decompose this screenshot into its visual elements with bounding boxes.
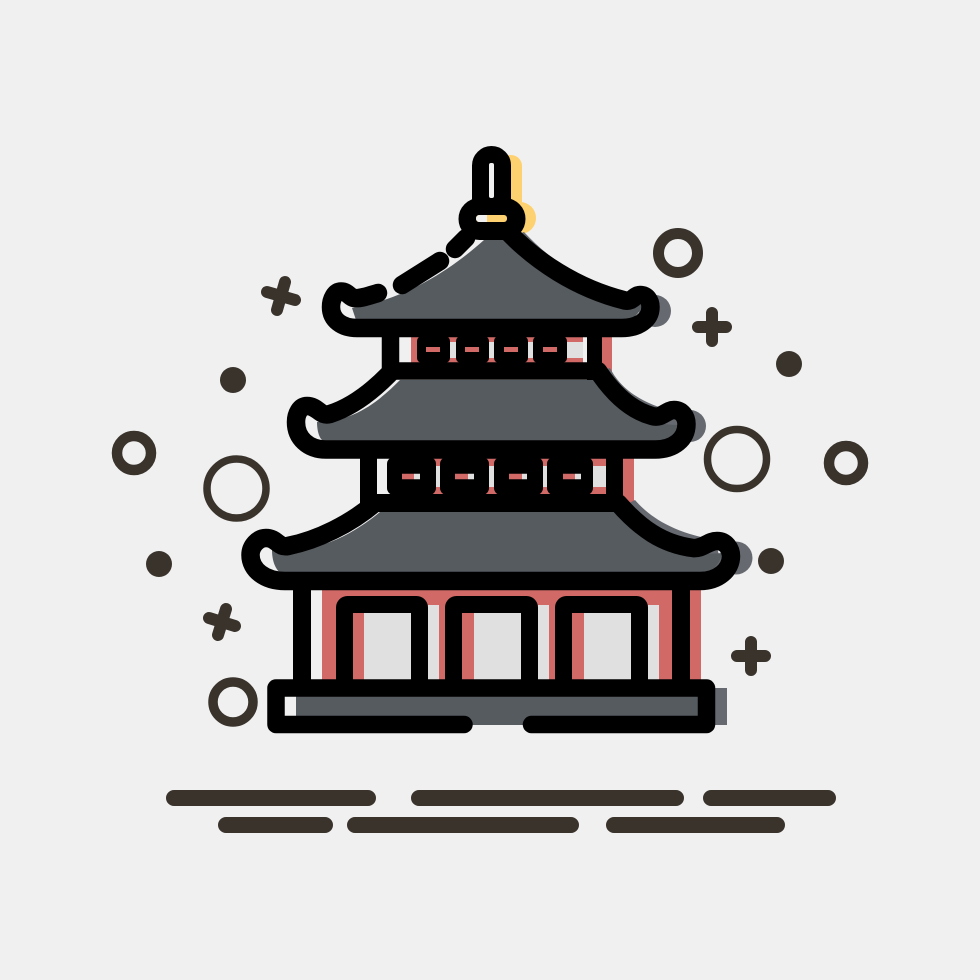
roof dashes <box>402 238 466 285</box>
roof outlines <box>250 232 731 581</box>
middle roof fill <box>317 368 706 445</box>
middle roof outline <box>296 371 686 450</box>
ground floor wall <box>293 586 701 683</box>
windows <box>344 604 640 690</box>
middle band <box>360 456 634 512</box>
ground lines <box>174 798 828 825</box>
decorative dots <box>146 351 802 577</box>
pagoda <box>250 154 752 725</box>
stone base <box>276 688 727 725</box>
top roof outline <box>331 232 650 328</box>
lower roof fill <box>272 500 752 578</box>
lower roof outline <box>250 503 731 581</box>
upper band <box>390 335 612 380</box>
finial shadow colour <box>500 155 536 234</box>
decorative plus signs <box>209 282 765 670</box>
top roof fill <box>352 232 671 327</box>
finial <box>467 154 517 232</box>
decorative circles <box>117 234 863 722</box>
